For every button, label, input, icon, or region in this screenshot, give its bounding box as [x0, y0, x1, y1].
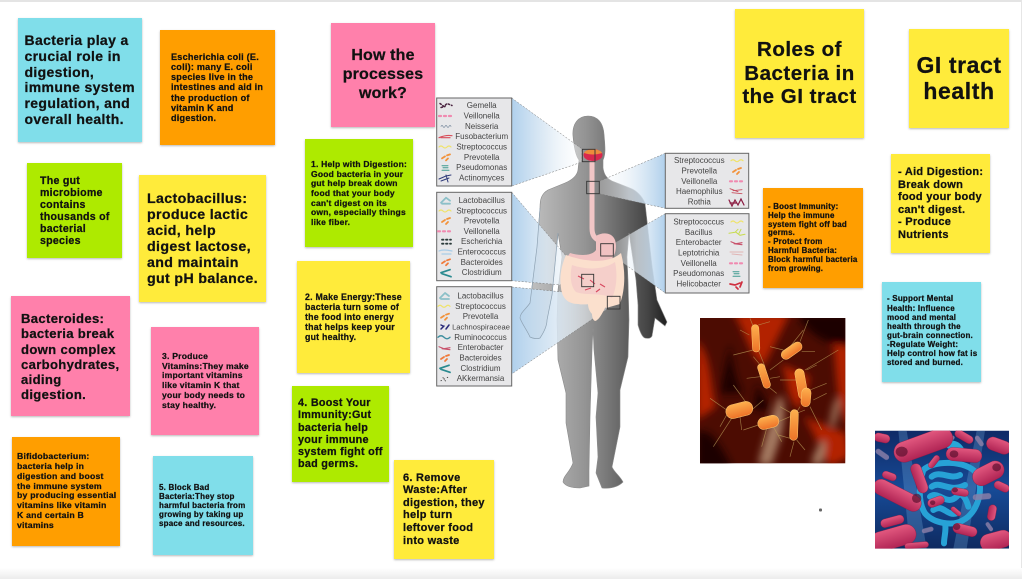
note: 3. Produce Vitamins: 3. Produce: [162, 351, 208, 361]
panel: oesophagus bacteria: Streptococcus: [674, 156, 725, 165]
panel: small intestine bacteria: Lactobacillus: [459, 196, 505, 205]
note: Bacteroides: aiding: [21, 372, 62, 387]
note: Lactobacillus: produce lactic: [147, 207, 248, 223]
note: 5. Block Bad Bacteria: harmful bacteria from: [159, 501, 245, 510]
note: Escherichia coli: Escherichia coli (E.: [171, 52, 259, 62]
note: gut microbiome: species: [40, 235, 81, 247]
note: 1. Help with Digestion: food that your body: [311, 188, 395, 198]
panel: oral bacteria: [437, 98, 512, 186]
note: Lactobacillus: acid, help: [147, 223, 216, 239]
heading: GI tract health: health: [923, 78, 995, 104]
heading: How the processes work?: processes: [343, 66, 423, 83]
note: Lactobacillus: and maintain: [147, 255, 239, 271]
panel: oesophagus bacteria: Haemophilus: [676, 187, 723, 196]
note: Bacteroides: Bacteroides:: [21, 311, 104, 326]
note: boost immunity and protection: - Protect from: [768, 237, 822, 246]
note: gut microbiome: [27, 163, 122, 258]
panel: stomach bacteria: Helicobacter: [676, 280, 721, 288]
note: Bacteroides: carbohydrates,: [21, 357, 119, 372]
panel: oral bacteria: Fusobacterium: [455, 132, 508, 141]
heading: Roles of Bacteria in the GI tract: [735, 9, 864, 138]
panel: large intestine bacteria: Lactobacillus: [457, 292, 504, 300]
note: gut microbiome: bacterial: [40, 223, 86, 235]
note: Escherichia coli: [160, 30, 275, 145]
note: bacteria overview: immune system: [24, 79, 135, 95]
note: boost immunity and protection: Help the immune: [768, 211, 835, 220]
note: mental health and weight: Health: Influence: [887, 304, 955, 313]
note: 6. Remove Waste: help turn: [403, 509, 453, 521]
note: 1. Help with Digestion: Good bacteria in your: [311, 169, 403, 179]
note: 4. Boost Your Immunity: bacteria help: [298, 422, 368, 434]
digestive organs: [560, 149, 624, 321]
note: 4. Boost Your Immunity: [292, 386, 389, 482]
note: 3. Produce Vitamins: like vitamin K that: [162, 380, 240, 390]
heading: Roles of Bacteria in the GI tract: Roles of: [757, 38, 842, 61]
note: bacteria overview: digestion,: [24, 64, 94, 80]
note: Bifidobacterium: Bifidobacterium:: [17, 451, 90, 461]
heading: GI tract health: [909, 29, 1009, 128]
note: Bifidobacterium: by producing essential: [17, 490, 116, 500]
note: bacteria overview: crucial role in: [24, 48, 121, 64]
note: boost immunity and protection: germs.: [768, 228, 795, 237]
note: 1. Help with Digestion: gut help break down: [311, 178, 398, 188]
panel: small intestine bacteria: Streptococcus: [456, 206, 507, 216]
note: 2. Make Energy: gut healthy.: [305, 332, 356, 342]
note: 1. Help with Digestion: can't digest on its: [311, 198, 387, 208]
note: aid digestion and nutrients: - Aid Digestion:: [898, 166, 983, 178]
panel: stomach bacteria: Pseudomonas: [673, 269, 724, 278]
note: boost immunity and protection: system fight off bad: [768, 220, 847, 229]
note: Bacteroides: [11, 296, 130, 416]
panel: oral bacteria: Gemella: [467, 101, 497, 110]
note: 2. Make Energy: 2. Make Energy:These: [305, 292, 402, 302]
panel: oesophagus bacteria: Prevotella: [682, 166, 718, 176]
note: boost immunity and protection: - Boost Immunity:: [768, 202, 838, 211]
note: 5. Block Bad Bacteria: growing by taking up: [159, 510, 243, 519]
note: 5. Block Bad Bacteria: 5. Block Bad: [159, 483, 209, 492]
diagram: human GI tract with bacteria panels and photos: [436, 98, 1009, 549]
note: Bifidobacterium: vitamins: [17, 520, 54, 530]
note: mental health and weight: -Regulate Weight:: [887, 340, 958, 349]
panel: stomach bacteria: Streptococcus: [673, 218, 724, 226]
note: 4. Boost Your Immunity: 4. Boost Your: [298, 397, 371, 409]
note: 6. Remove Waste: [394, 460, 494, 559]
photo: pink bacteria around blue intestines: [875, 430, 1009, 549]
speck: [819, 508, 822, 512]
panel: oesophagus bacteria: [665, 153, 749, 208]
note: 4. Boost Your Immunity: bad germs.: [298, 458, 358, 470]
note: boost immunity and protection: Harmful Bacteria:: [768, 246, 837, 255]
note: 6. Remove Waste: digestion, they: [403, 497, 485, 509]
left arm outline: [520, 208, 558, 339]
note: 3. Produce Vitamins: [151, 327, 259, 435]
note: Bifidobacterium: vitamins like vitamin: [17, 500, 107, 510]
note: 2. Make Energy: [297, 261, 410, 373]
note: 4. Boost Your Immunity: Immunity:Gut: [298, 409, 371, 421]
note: 3. Produce Vitamins: important vitamins: [162, 370, 243, 380]
note: mental health and weight: health through the: [887, 322, 961, 331]
note: Escherichia coli: the production of: [171, 93, 250, 103]
panel: large intestine bacteria: Clostridium: [460, 364, 501, 373]
panel: stomach bacteria: Enterobacter: [676, 238, 722, 247]
panel: oral bacteria: Streptococcus: [456, 142, 507, 152]
note: 3. Produce Vitamins: Vitamins:They make: [162, 361, 249, 371]
note: Bifidobacterium: [12, 437, 120, 546]
panel: stomach bacteria: Veillonella: [681, 259, 717, 268]
panel: oral bacteria: Neisseria: [465, 122, 499, 131]
note: 6. Remove Waste: Waste:After: [403, 484, 467, 496]
note: 4. Boost Your Immunity: system fight off: [298, 446, 383, 458]
heading: How the processes work?: How the: [351, 47, 415, 64]
note: 6. Remove Waste: into waste: [403, 535, 460, 547]
note: Lactobacillus: Lactobacillus:: [147, 191, 247, 207]
note: 5. Block Bad Bacteria: Bacteria:They stop: [159, 492, 235, 501]
note: mental health and weight: stored and burned.: [887, 358, 963, 367]
note: 5. Block Bad Bacteria: space and resources.: [159, 519, 245, 528]
note: Escherichia coli: species live in the: [171, 72, 253, 82]
note: mental health and weight: mood and mental: [887, 313, 956, 322]
note: 2. Make Energy: bacteria turn some of: [305, 302, 399, 312]
panel: large intestine bacteria: AKkermansia: [457, 374, 505, 383]
note: mental health and weight: gut-brain connection.: [887, 331, 973, 340]
note: mental health and weight: [882, 282, 981, 382]
sampling site boxes: [582, 149, 620, 309]
page frame edges: [0, 0, 1022, 2]
panel: oesophagus bacteria: Veillonella: [681, 177, 718, 186]
note: boost immunity and protection: Block harmful bacteria: [768, 255, 857, 264]
panel: large intestine bacteria: [437, 287, 512, 386]
heading: Roles of Bacteria in the GI tract: the GI tract: [742, 85, 857, 108]
note: gut microbiome: microbiome: [40, 187, 103, 199]
note: Lactobacillus: digest lactose,: [147, 239, 251, 255]
note: 6. Remove Waste: leftover food: [403, 522, 473, 534]
note: aid digestion and nutrients: Nutrients: [898, 229, 949, 241]
panel: small intestine bacteria: Prevotella: [464, 216, 500, 226]
panel: large intestine bacteria: Bacteroides: [459, 354, 502, 362]
note: 5. Block Bad Bacteria: [153, 456, 253, 555]
panel: large intestine bacteria: Prevotella: [463, 312, 499, 321]
note: boost immunity and protection: [763, 188, 863, 288]
panel: oesophagus bacteria: Rothia: [688, 198, 711, 206]
note: boost immunity and protection: from growing.: [768, 264, 823, 273]
note: aid digestion and nutrients: [891, 154, 990, 253]
panel: small intestine bacteria: Enterococcus: [457, 248, 506, 256]
note: bacteria overview: Bacteria play a: [24, 32, 129, 48]
note: gut microbiome: thousands of: [40, 211, 110, 223]
note: aid digestion and nutrients: - Produce: [898, 216, 951, 228]
panel: oral bacteria: Pseudomonas: [456, 163, 507, 172]
note: Escherichia coli: coli): many E. coli: [171, 62, 253, 72]
note: Bacteroides: bacteria break: [21, 326, 114, 341]
note: aid digestion and nutrients: can't digest.: [898, 204, 965, 216]
note: 3. Produce Vitamins: your body needs to: [162, 390, 245, 400]
note: Bacteroides: digestion.: [21, 387, 86, 402]
photo: orange E. coli bacteria on red background: [700, 318, 846, 464]
note: 1. Help with Digestion: like fiber.: [311, 217, 350, 227]
panel: small intestine bacteria: Veillonella: [464, 227, 500, 236]
note: Escherichia coli: vitamin K and: [171, 103, 234, 113]
note: mental health and weight: Help control how fat is: [887, 349, 977, 358]
note: Bifidobacterium: K and certain B: [17, 510, 84, 520]
note: Lactobacillus: gut pH balance.: [147, 271, 258, 287]
heading: Roles of Bacteria in the GI tract: Bacteria in: [744, 62, 855, 85]
panel: small intestine bacteria: Clostridium: [462, 268, 502, 277]
note: 6. Remove Waste: 6. Remove: [403, 472, 461, 484]
note: gut microbiome: contains: [40, 199, 86, 211]
panel: large intestine bacteria: Enterobacter: [458, 343, 504, 352]
panel: oral bacteria: Actinomyces: [459, 174, 504, 182]
note: 3. Produce Vitamins: stay healthy.: [162, 400, 216, 410]
note: Bifidobacterium: bacteria help in: [17, 461, 84, 471]
heading: GI tract health: GI tract: [916, 52, 1002, 78]
note: 1. Help with Digestion: own, especially things: [311, 207, 406, 217]
note: aid digestion and nutrients: food your body: [898, 191, 982, 203]
panel: small intestine bacteria: Escherichia: [461, 237, 503, 246]
note: aid digestion and nutrients: Break down: [898, 179, 963, 191]
panel: large intestine bacteria: Ruminococcus: [454, 333, 507, 342]
note: gut microbiome: The gut: [40, 175, 80, 187]
note: bacteria overview: [18, 18, 142, 142]
heading: How the processes work?: [331, 23, 435, 127]
note: 1. Help with Digestion: 1. Help with Digestion:: [311, 159, 407, 169]
note: 1. Help with Digestion: [305, 139, 413, 247]
note: Lactobacillus: [139, 175, 266, 302]
note: 2. Make Energy: the food into energy: [305, 312, 394, 322]
panel: oral bacteria: Prevotella: [464, 153, 500, 162]
note: Bifidobacterium: digestion and boost: [17, 471, 104, 481]
heading: How the processes work?: work?: [359, 85, 407, 102]
note: bacteria overview: overall health.: [24, 111, 124, 127]
note: Bacteroides: down complex: [21, 342, 116, 356]
panel: large intestine bacteria: Streptococcus: [455, 302, 506, 311]
panel: small intestine bacteria: [437, 192, 512, 281]
note: 2. Make Energy: that helps keep your: [305, 322, 395, 332]
panel: stomach bacteria: Bacillus: [685, 228, 712, 237]
panel: stomach bacteria: [665, 214, 749, 293]
note: Escherichia coli: intestines and aid in: [171, 82, 263, 92]
note: Bifidobacterium: the immune system: [17, 481, 102, 491]
projection wedges to the bacteria panels: [512, 98, 665, 374]
note: mental health and weight: - Support Mental: [887, 294, 953, 303]
panel: oral bacteria: Veillonella: [464, 112, 500, 120]
human body silhouette: [520, 116, 667, 488]
panel: stomach bacteria: Leptotrichia: [678, 248, 720, 258]
panel: small intestine bacteria: Bacteroides: [461, 258, 503, 267]
panel: large intestine bacteria: Lachnospiraceae: [452, 322, 510, 332]
note: bacteria overview: regulation, and: [24, 95, 130, 111]
note: 4. Boost Your Immunity: your immune: [298, 434, 369, 446]
note: Escherichia coli: digestion.: [171, 113, 216, 123]
